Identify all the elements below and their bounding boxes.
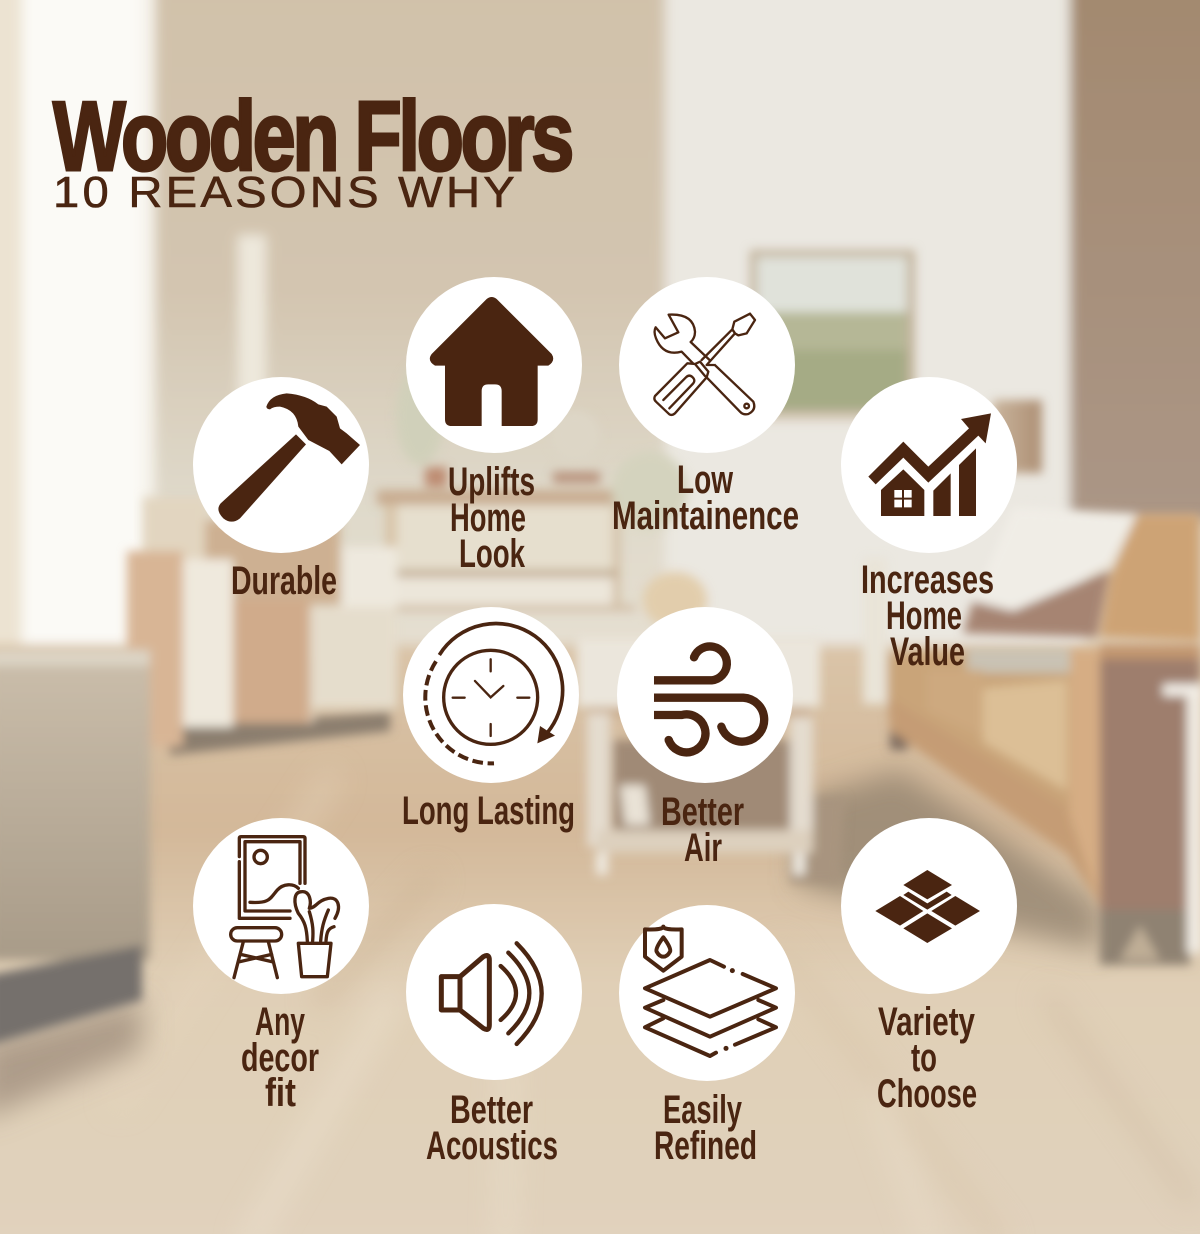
label: to — [911, 1036, 937, 1080]
label: Home — [886, 594, 962, 638]
label: fit — [265, 1071, 296, 1115]
reason: Any decor fit — [193, 818, 369, 1115]
label: Increases — [861, 558, 994, 602]
lamp — [993, 400, 1042, 473]
reason: Better Air — [617, 607, 793, 870]
icon: house — [430, 297, 553, 426]
icon: floor tiles — [875, 870, 980, 943]
label: Low — [677, 458, 734, 502]
subtitle: 10 REASONS WHY — [53, 168, 518, 217]
label: Better — [450, 1088, 533, 1132]
icon: house value chart — [868, 413, 991, 516]
title: Wooden Floors — [53, 81, 571, 191]
picture on wall — [750, 250, 915, 418]
reason: Easily Refined — [619, 905, 795, 1168]
left sofa — [0, 660, 150, 960]
label: Long Lasting — [402, 789, 575, 833]
label — [861, 558, 994, 674]
icon: wrench and screwdriver — [654, 314, 755, 415]
label: Choose — [877, 1072, 977, 1116]
reason: Uplifts Home Look — [406, 277, 582, 576]
label: Easily — [663, 1088, 743, 1132]
label: Refined — [654, 1124, 757, 1168]
coffee table — [613, 740, 790, 830]
floor shadows — [0, 770, 1100, 1120]
label: Value — [890, 630, 965, 674]
armchair — [143, 497, 207, 559]
label — [448, 460, 535, 576]
reason: Increases Home Value — [841, 377, 1017, 674]
icon: picture, stool and plant — [231, 837, 338, 978]
icon: speaker — [441, 943, 542, 1044]
label: Any — [255, 1000, 305, 1044]
label: Variety — [878, 1000, 976, 1044]
label — [661, 790, 744, 870]
floor plank streaks — [120, 780, 1190, 1234]
label: decor — [241, 1036, 319, 1080]
label: Uplifts — [448, 460, 535, 504]
icon: wind — [654, 646, 764, 752]
right sofa — [863, 558, 887, 704]
label — [877, 1000, 977, 1116]
reason: Durable — [193, 377, 369, 603]
label — [426, 1088, 558, 1168]
label: Home — [450, 496, 526, 540]
label: Better — [661, 790, 744, 834]
label: Maintainence — [612, 494, 799, 538]
label: Look — [459, 532, 526, 576]
label — [241, 1000, 319, 1115]
reason: Low Maintainence — [612, 277, 799, 538]
icon: clock — [425, 623, 563, 763]
reason: Variety to Choose — [841, 818, 1017, 1116]
reason: Better Acoustics — [406, 904, 582, 1168]
label: Air — [684, 826, 722, 870]
label: Acoustics — [426, 1124, 558, 1168]
label — [654, 1088, 757, 1168]
icon: floor layers with water shield — [645, 927, 776, 1056]
reason: Long Lasting — [402, 607, 579, 833]
label — [612, 458, 799, 538]
label: Durable — [231, 559, 337, 603]
console table — [397, 505, 615, 571]
icon: hammer — [218, 393, 360, 522]
